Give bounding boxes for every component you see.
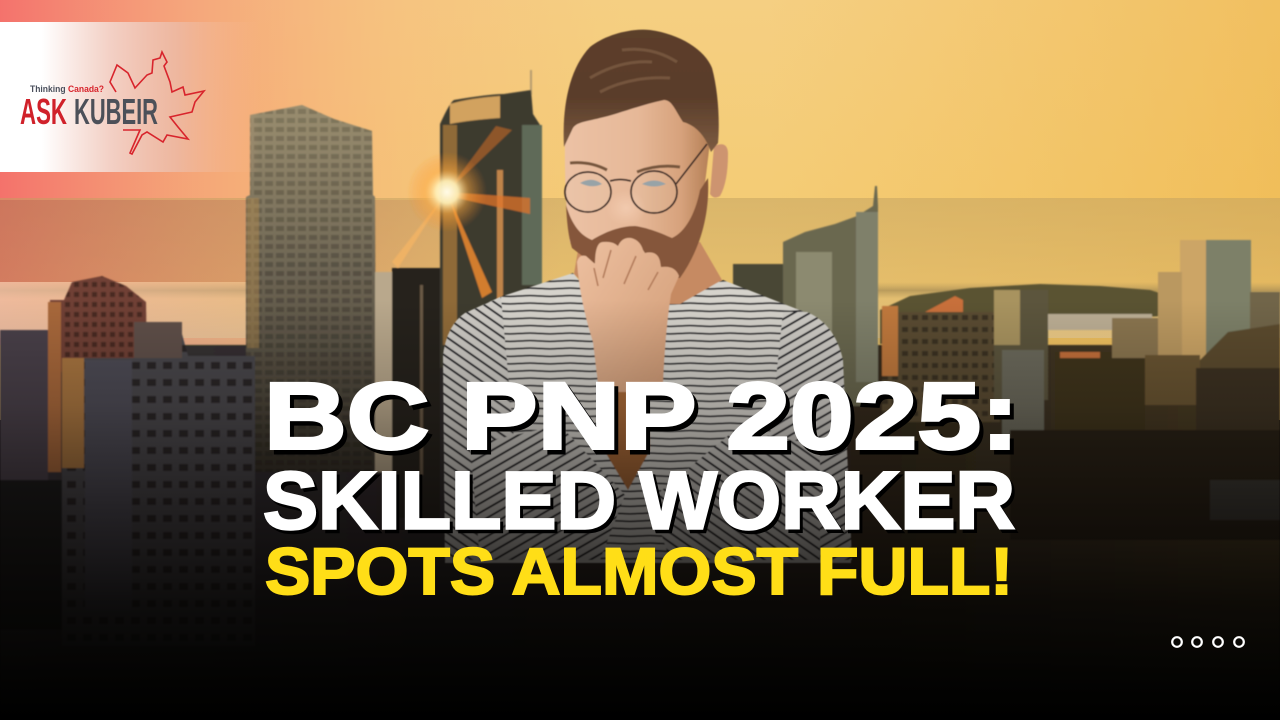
distant treeline [880,284,1170,344]
neck [574,242,722,304]
ear [710,144,728,198]
folded arm right [650,430,820,560]
hair [564,30,719,152]
low foreground blocks [0,430,1280,630]
eyebrows [570,163,680,172]
title line 1: BC PNP 2025: [268,368,1023,474]
eyes [580,180,666,186]
person: thinking man [443,30,852,563]
low fog [1048,314,1152,330]
icon: maple leaf outline [110,52,204,154]
building: left glass tower [246,105,376,472]
shirt [443,273,851,563]
logo tagline: Thinking Canada? [30,84,104,95]
building: far right towers [1145,240,1280,488]
title line 3: SPOTS ALMOST FULL! [265,534,1013,608]
logo wordmark: ASK: ASK [20,91,67,132]
dark ground mass [0,345,1280,720]
building: right cluster tower [733,186,878,406]
logo wordmark: KUBEIR: KUBEIR [74,91,158,132]
logo panel [0,22,260,172]
dark gradient overlay [0,300,1280,720]
hand [577,238,679,392]
building: central glass tower with sun [392,70,542,368]
forearm [602,360,650,490]
sleeve right [757,312,852,560]
knuckle lines [594,250,658,290]
building: pale and dark slab [375,268,440,518]
glasses [565,144,707,213]
title line 2: SKILLED WORKER [266,459,1018,550]
sleeve left [443,297,525,560]
hair highlights [590,49,677,92]
headline [263,364,1023,608]
building: mid right blocks [882,290,1160,442]
building: left balcony block [62,322,255,646]
face [565,96,710,276]
building: far left block [0,330,48,520]
nose [606,190,646,226]
beard [566,178,708,278]
title line 2: SKILLED WORKER [263,456,1015,547]
background: sunset sky [0,0,1280,420]
pagination dots [1172,637,1244,647]
folded arm left [470,425,625,560]
title line 1: BC PNP 2025: [264,364,1019,470]
building: left red brick [48,276,147,472]
